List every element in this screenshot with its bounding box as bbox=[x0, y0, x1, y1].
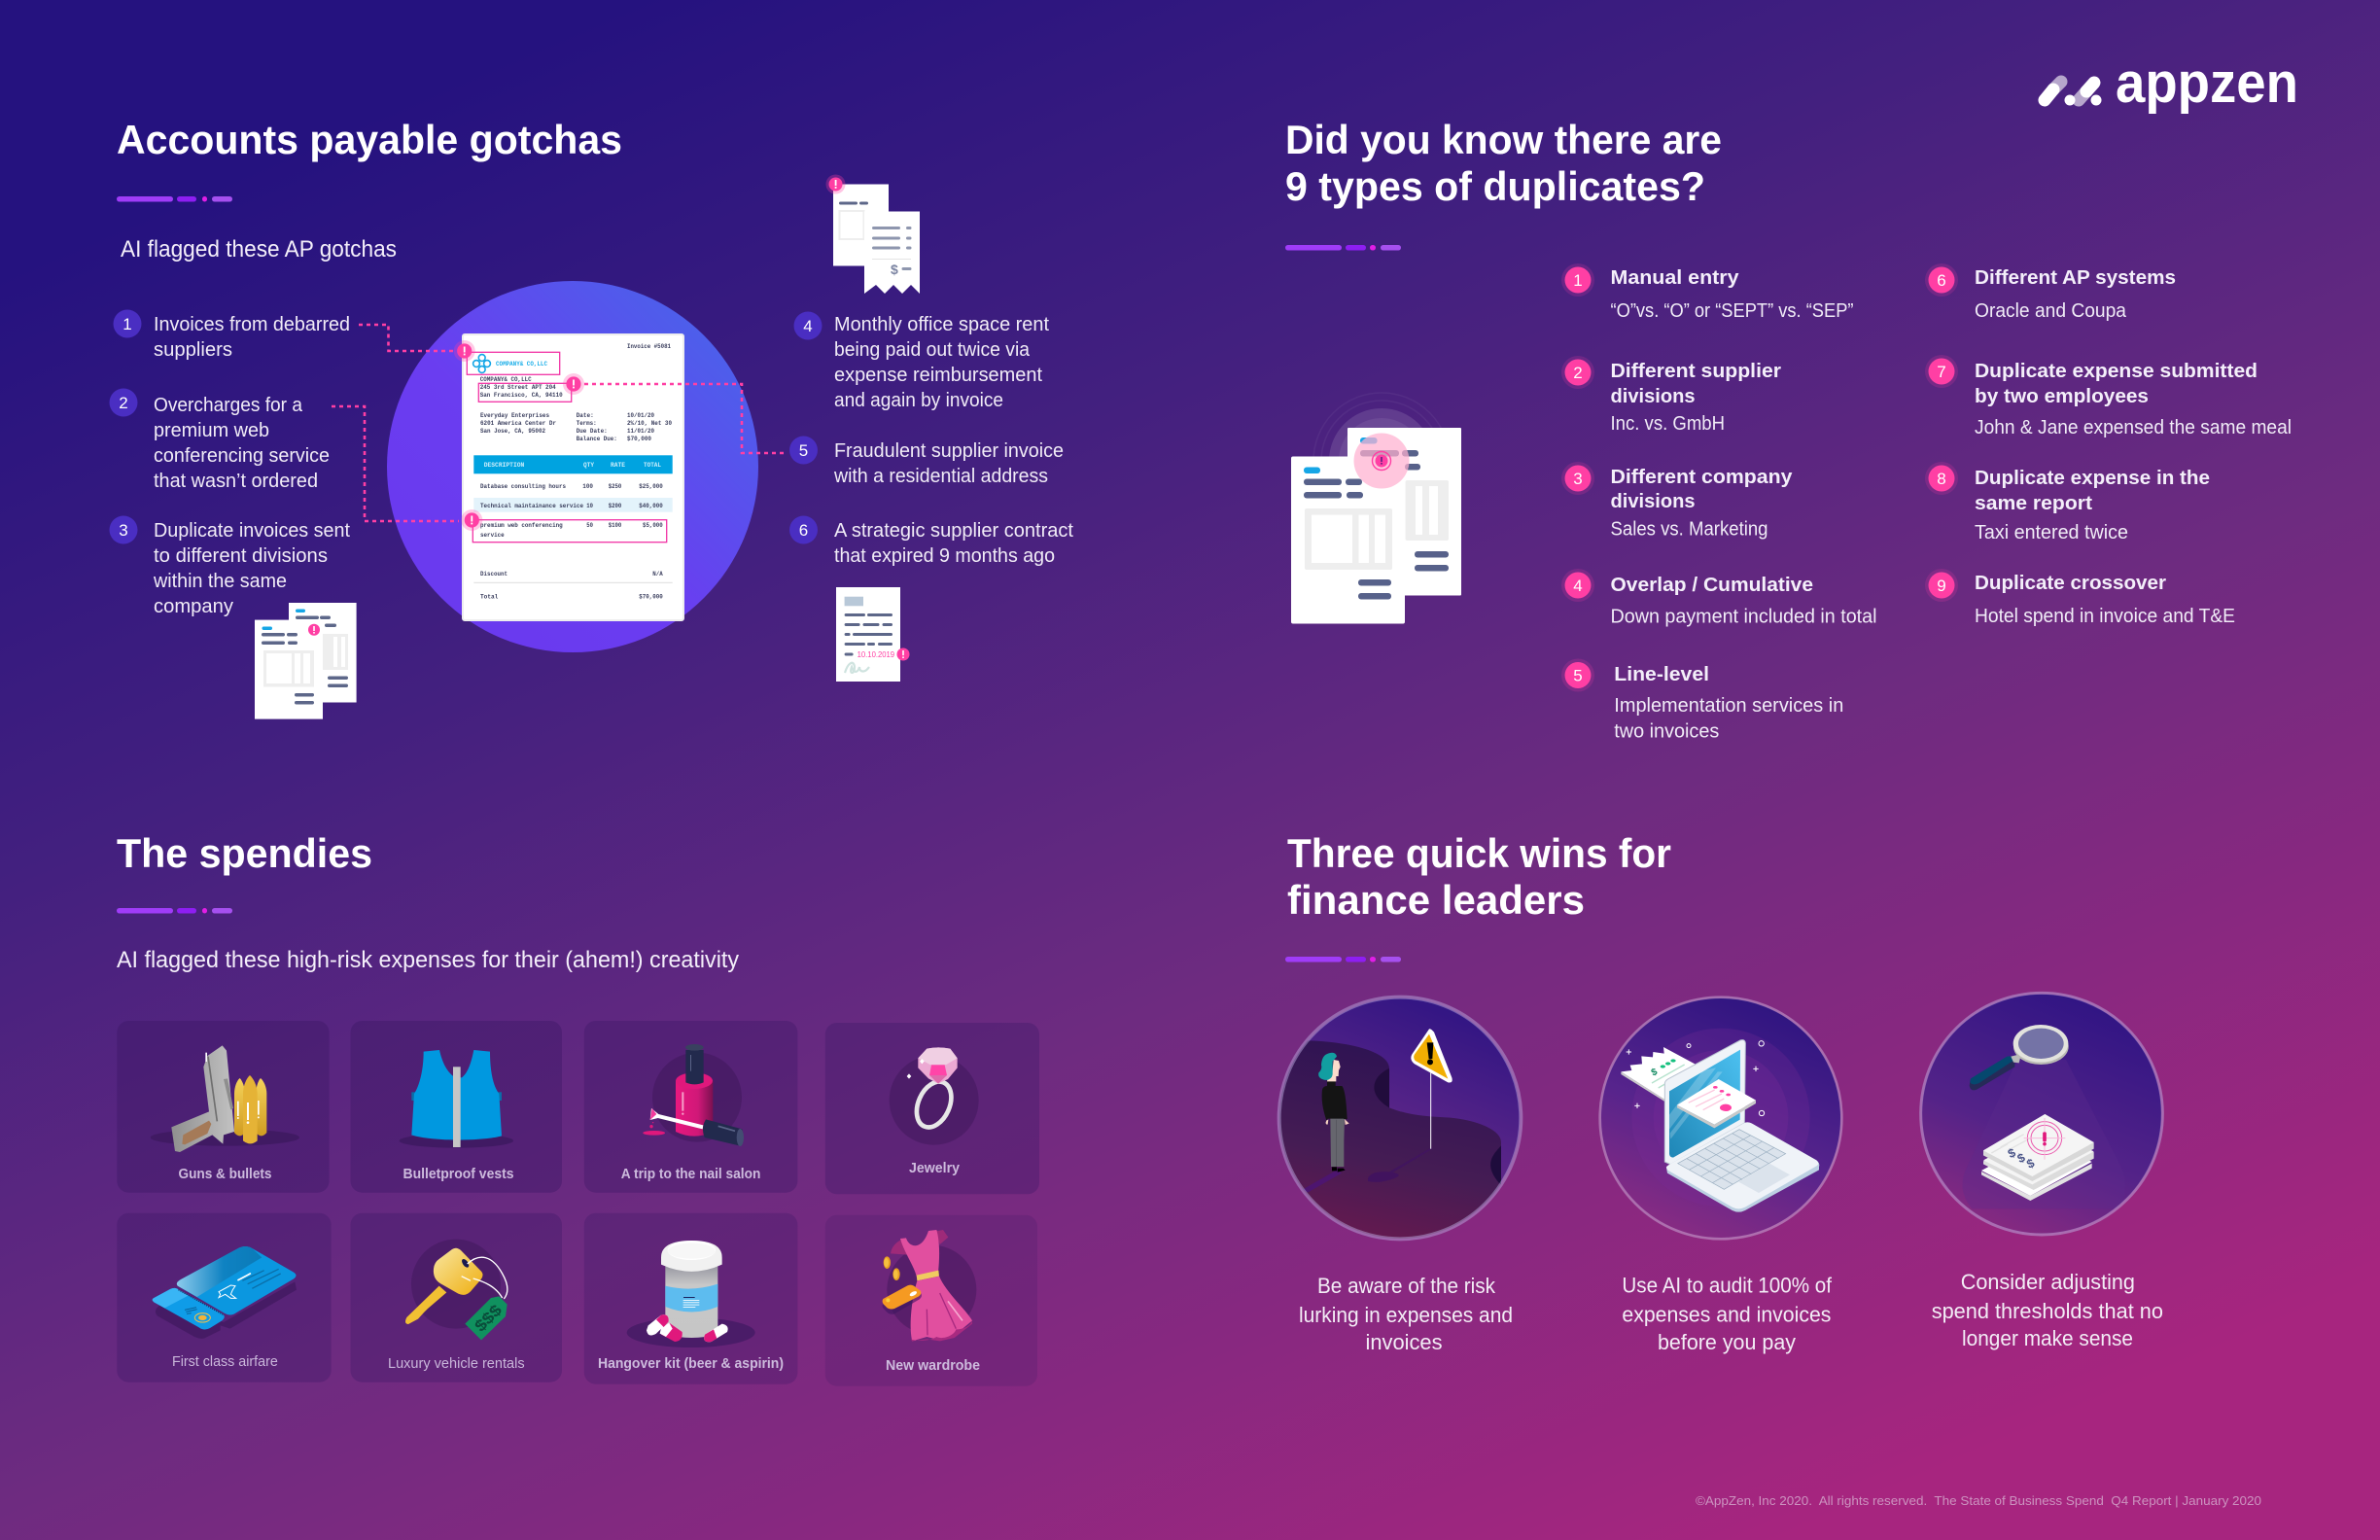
list item 4: 4 bbox=[803, 317, 813, 335]
duplicate type 7 bbox=[1925, 355, 2292, 438]
card: guns and bullets: Guns & bullets bbox=[179, 1167, 272, 1182]
heading: Accounts payable gotchas bbox=[117, 117, 622, 162]
duplicate type 1: Manual entry bbox=[1610, 266, 1739, 289]
invoice document: $100 bbox=[609, 522, 621, 529]
panel: three quick wins bbox=[1269, 830, 2163, 1354]
invoice document: 50 bbox=[586, 522, 593, 529]
duplicate type 6: Oracle and Coupa bbox=[1975, 299, 2127, 322]
invoice document: COMPANY& CO,LLC bbox=[480, 376, 532, 383]
duplicate type 1: 1 bbox=[1573, 271, 1583, 290]
subheading: AI flagged these AP gotchas bbox=[121, 236, 397, 262]
invoice document: Total bbox=[480, 593, 498, 601]
card: jewelry bbox=[825, 1023, 1039, 1194]
card: jewelry: Jewelry bbox=[909, 1161, 960, 1176]
list item 2: 2 bbox=[119, 394, 128, 412]
list item 3: to different divisions bbox=[154, 544, 328, 567]
invoice document: 10 bbox=[586, 503, 593, 509]
duplicate type 5: Implementation services in bbox=[1614, 694, 1843, 717]
card: new wardrobe bbox=[825, 1215, 1037, 1386]
list item 2: Overcharges for a bbox=[154, 394, 303, 416]
list item 5 bbox=[789, 436, 1064, 487]
card: hangover kit: Hangover kit (beer & aspirin) bbox=[598, 1356, 784, 1372]
panel: the spendies bbox=[117, 830, 1039, 1386]
panel: accounts payable gotchas bbox=[109, 117, 1073, 719]
duplicate type 3: Sales vs. Marketing bbox=[1610, 517, 1768, 541]
duplicate type 6: 6 bbox=[1937, 271, 1946, 290]
duplicate type 6: Different AP systems bbox=[1975, 266, 2176, 289]
list item 5: Fraudulent supplier invoice bbox=[834, 439, 1064, 462]
list item 3: company bbox=[154, 595, 234, 617]
invoice document: premium web conferencing bbox=[480, 522, 563, 529]
divider bbox=[117, 908, 232, 914]
duplicate type 9: 9 bbox=[1937, 577, 1946, 595]
invoice document: $5,000 bbox=[643, 522, 663, 529]
invoice document: 11/01/20 bbox=[627, 428, 654, 435]
list item 4: Monthly office space rent bbox=[834, 313, 1049, 335]
duplicate type 7: John & Jane expensed the same meal bbox=[1975, 416, 2292, 438]
caption: risk: invoices bbox=[1365, 1330, 1443, 1354]
card: bulletproof vests: Bulletproof vests bbox=[402, 1167, 513, 1182]
invoice document: $40,000 bbox=[639, 503, 663, 509]
illustration: laptop AI audit circle bbox=[1600, 998, 1841, 1239]
duplicate type 8: Taxi entered twice bbox=[1975, 521, 2128, 543]
duplicate type 7: by two employees bbox=[1975, 385, 2149, 407]
invoice document: DESCRIPTION bbox=[484, 462, 524, 469]
connector lines bbox=[332, 325, 784, 521]
duplicate type 2: Inc. vs. GmbH bbox=[1610, 412, 1725, 435]
duplicate type 3: 3 bbox=[1573, 470, 1583, 488]
list item 1: 1 bbox=[122, 315, 132, 333]
card: nail salon bbox=[584, 1021, 797, 1193]
card: luxury vehicle rentals: Luxury vehicle rentals bbox=[388, 1356, 525, 1372]
duplicate type 5: Line-level bbox=[1614, 663, 1709, 685]
invoice document: Balance Due: bbox=[577, 436, 617, 442]
divider bbox=[117, 196, 232, 202]
duplicate type 9: Hotel spend in invoice and T&E bbox=[1975, 605, 2235, 627]
illustration: flagged duplicate documents bbox=[1291, 393, 1461, 624]
duplicate type 4: 4 bbox=[1573, 577, 1583, 595]
icon: duplicate documents bbox=[255, 603, 357, 719]
invoice document: COMPANY& CO,LLC bbox=[496, 361, 547, 368]
duplicate type 7: 7 bbox=[1937, 363, 1946, 381]
list item 1: Invoices from debarred bbox=[154, 313, 350, 335]
duplicate type 4: Overlap / Cumulative bbox=[1610, 574, 1813, 596]
invoice document: Technical maintainance service bbox=[480, 503, 583, 509]
duplicate type 4 bbox=[1561, 569, 1876, 628]
divider bbox=[1285, 957, 1401, 962]
invoice document: N/A bbox=[652, 571, 663, 578]
invoice document: $250 bbox=[609, 483, 621, 490]
duplicate type 4: Down payment included in total bbox=[1610, 605, 1876, 628]
illustration: magnifier thresholds circle bbox=[1921, 993, 2162, 1235]
heading: The spendies bbox=[117, 830, 372, 876]
caption: risk: lurking in expenses and bbox=[1299, 1303, 1513, 1327]
list item 2: that wasn’t ordered bbox=[154, 470, 318, 492]
invoice document: RATE bbox=[611, 462, 625, 469]
card: bulletproof vests bbox=[350, 1021, 562, 1193]
card: nail salon: A trip to the nail salon bbox=[621, 1167, 760, 1182]
list item 6: A strategic supplier contract bbox=[834, 519, 1073, 542]
list item 3 bbox=[109, 515, 350, 617]
card: hangover kit bbox=[584, 1213, 797, 1384]
list item 6: 6 bbox=[799, 521, 808, 540]
footer: ©AppZen, Inc 2020. All rights reserved. The State of Business Spend Q4 Report | January 2020 bbox=[1696, 1493, 2261, 1508]
heading: Three quick wins for bbox=[1287, 830, 1671, 876]
illustration: invoice disc bbox=[387, 281, 758, 652]
caption: thresholds: spend thresholds that no bbox=[1932, 1299, 2163, 1323]
list item 3: within the same bbox=[153, 570, 287, 592]
icon: expired contract bbox=[836, 587, 910, 682]
icon: receipt and document: $ bbox=[891, 262, 898, 277]
card: luxury vehicle rentals: $$$ bbox=[471, 1300, 507, 1336]
invoice document: $25,000 bbox=[639, 483, 663, 490]
caption: risk bbox=[1299, 1274, 1513, 1354]
list item 4: and again by invoice bbox=[834, 389, 1003, 411]
duplicate type 8 bbox=[1925, 462, 2210, 543]
list item 4: expense reimbursement bbox=[834, 364, 1042, 386]
invoice document: 100 bbox=[582, 483, 593, 490]
card: new wardrobe: New wardrobe bbox=[886, 1358, 980, 1374]
illustration: risk sign circle bbox=[1269, 998, 1521, 1240]
invoice document: Database consulting hours bbox=[480, 483, 566, 490]
heading: Did you know there are bbox=[1285, 117, 1722, 162]
invoice document: $200 bbox=[609, 503, 621, 509]
icon: receipt and document bbox=[826, 175, 920, 294]
list item 6: that expired 9 months ago bbox=[834, 544, 1055, 567]
caption: audit bbox=[1622, 1274, 1833, 1354]
duplicate type 5: two invoices bbox=[1614, 719, 1719, 743]
list item 5: 5 bbox=[799, 441, 808, 460]
invoice document: $70,000 bbox=[639, 593, 663, 601]
list item 2 bbox=[109, 389, 330, 492]
duplicate type 3: Different company bbox=[1610, 466, 1793, 488]
panel: 9 types of duplicates bbox=[1285, 117, 2292, 743]
invoice document: San Francisco, CA, 94110 bbox=[480, 392, 563, 399]
invoice document: 6201 America Center Dr bbox=[480, 420, 556, 427]
duplicate type 6 bbox=[1925, 263, 2176, 322]
list item 1 bbox=[113, 309, 350, 361]
illustration: laptop AI audit circle: $ bbox=[1650, 1067, 1660, 1079]
duplicate type 8: 8 bbox=[1937, 470, 1946, 488]
invoice document: $70,000 bbox=[627, 436, 651, 442]
heading: 9 types of duplicates? bbox=[1285, 163, 1705, 209]
invoice document: 10/01/20 bbox=[627, 412, 654, 419]
card: luxury vehicle rentals bbox=[350, 1213, 562, 1382]
duplicate type 3 bbox=[1561, 462, 1793, 541]
logo: appzen bbox=[2045, 52, 2298, 115]
duplicate type 8: same report bbox=[1975, 492, 2092, 514]
invoice document: QTY bbox=[583, 462, 594, 469]
illustration: magnifier thresholds circle: $ bbox=[2006, 1146, 2017, 1161]
heading bbox=[1287, 830, 1671, 923]
card: first class airfare: First class airfare bbox=[172, 1354, 278, 1370]
invoice document: Date: bbox=[577, 412, 594, 419]
card: guns and bullets bbox=[117, 1021, 330, 1193]
duplicate type 1: “O”vs. “O” or “SEPT” vs. “SEP” bbox=[1610, 299, 1854, 322]
invoice document: Invoice #5081 bbox=[627, 343, 671, 350]
caption: thresholds: Consider adjusting bbox=[1961, 1270, 2135, 1294]
invoice document bbox=[463, 334, 683, 620]
list item 2: premium web bbox=[154, 419, 269, 441]
logo: appzen: appzen bbox=[2116, 52, 2298, 115]
caption: audit: before you pay bbox=[1658, 1330, 1796, 1354]
duplicate type 9: Duplicate crossover bbox=[1975, 572, 2166, 594]
duplicate type 5 bbox=[1561, 659, 1843, 743]
invoice document: 245 3rd Street APT 204 bbox=[480, 384, 556, 391]
caption: audit: expenses and invoices bbox=[1622, 1303, 1831, 1326]
divider bbox=[1285, 245, 1401, 251]
invoice document: Discount bbox=[480, 571, 508, 578]
list item 2: conferencing service bbox=[154, 444, 330, 467]
illustration: magnifier thresholds circle: $ bbox=[2024, 1156, 2037, 1172]
duplicate type 2: Different supplier bbox=[1610, 360, 1781, 382]
caption: thresholds: longer make sense bbox=[1962, 1326, 2133, 1350]
duplicate type 3: divisions bbox=[1610, 490, 1696, 512]
invoice document: Due Date: bbox=[577, 428, 608, 435]
invoice document: San Jose, CA, 95002 bbox=[480, 428, 545, 435]
list item 3: 3 bbox=[119, 521, 128, 540]
invoice document: Everyday Enterprises bbox=[480, 412, 549, 419]
duplicate type 5: 5 bbox=[1573, 667, 1583, 684]
duplicate type 8: Duplicate expense in the bbox=[1975, 467, 2210, 489]
duplicate type 1 bbox=[1561, 263, 1854, 322]
invoice document: Terms: bbox=[577, 420, 597, 427]
invoice document: TOTAL bbox=[644, 462, 661, 469]
caption: thresholds bbox=[1932, 1270, 2163, 1350]
invoice flags bbox=[454, 340, 584, 531]
list item 3: Duplicate invoices sent bbox=[154, 519, 350, 542]
heading bbox=[1285, 117, 1722, 209]
duplicate type 2 bbox=[1561, 356, 1781, 435]
card: first class airfare bbox=[117, 1213, 332, 1382]
invoice document: service bbox=[480, 532, 505, 539]
invoice document: 2%/10, Net 30 bbox=[627, 420, 672, 427]
duplicate type 9 bbox=[1925, 569, 2235, 627]
illustration: magnifier thresholds circle: $ bbox=[2015, 1151, 2027, 1166]
duplicate type 2: 2 bbox=[1573, 364, 1583, 382]
duplicate type 2: divisions bbox=[1610, 385, 1696, 407]
list item 4 bbox=[793, 311, 1049, 411]
list item 4: being paid out twice via bbox=[834, 338, 1031, 361]
caption: audit: Use AI to audit 100% of bbox=[1622, 1274, 1833, 1297]
heading: finance leaders bbox=[1287, 877, 1585, 923]
list item 5: with a residential address bbox=[833, 465, 1048, 487]
icon: expired contract: 10.10.2019 bbox=[858, 649, 894, 659]
list item 6 bbox=[789, 515, 1073, 567]
list item 1: suppliers bbox=[154, 338, 232, 361]
duplicate type 7: Duplicate expense submitted bbox=[1975, 360, 2258, 382]
subheading: AI flagged these high-risk expenses for their (ahem!) creativity bbox=[117, 947, 739, 973]
caption: risk: Be aware of the risk bbox=[1317, 1274, 1496, 1298]
